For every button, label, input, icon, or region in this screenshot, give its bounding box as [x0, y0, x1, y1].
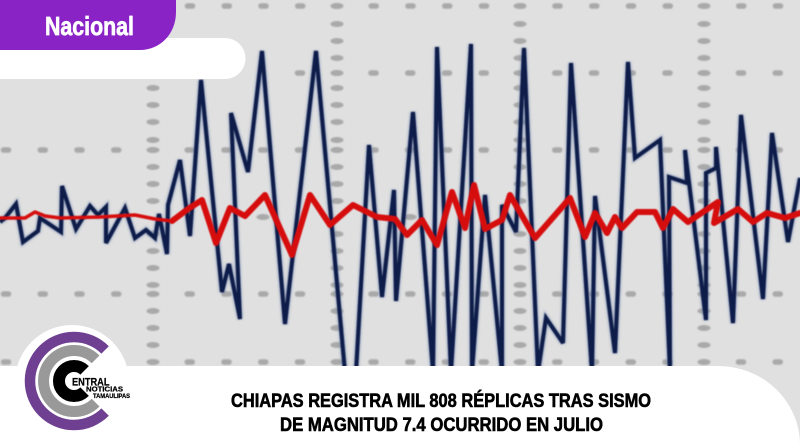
section label: Nacional: [45, 11, 134, 41]
bottom white title panel: [0, 366, 800, 445]
logo wordmark: ENTRAL: [72, 376, 110, 388]
seismograph line: red: [0, 185, 800, 255]
headline: DE MAGNITUD 7.4 OCURRIDO EN JULIO: [280, 415, 603, 436]
seismograph line: blue: [0, 44, 800, 372]
logo white disc: [15, 325, 129, 439]
headline: CHIAPAS REGISTRA MIL 808 RÉPLICAS TRAS SISMO: [231, 390, 651, 412]
headline: [231, 390, 651, 436]
logo wordmark: NOTICIAS: [86, 384, 123, 394]
logo wordmark: [72, 376, 131, 400]
logo: [15, 325, 131, 439]
logo wordmark: TAMAULIPAS: [93, 393, 131, 400]
logo rings: [30, 337, 105, 425]
white headline pill: [0, 38, 246, 79]
section tab: [0, 0, 176, 50]
